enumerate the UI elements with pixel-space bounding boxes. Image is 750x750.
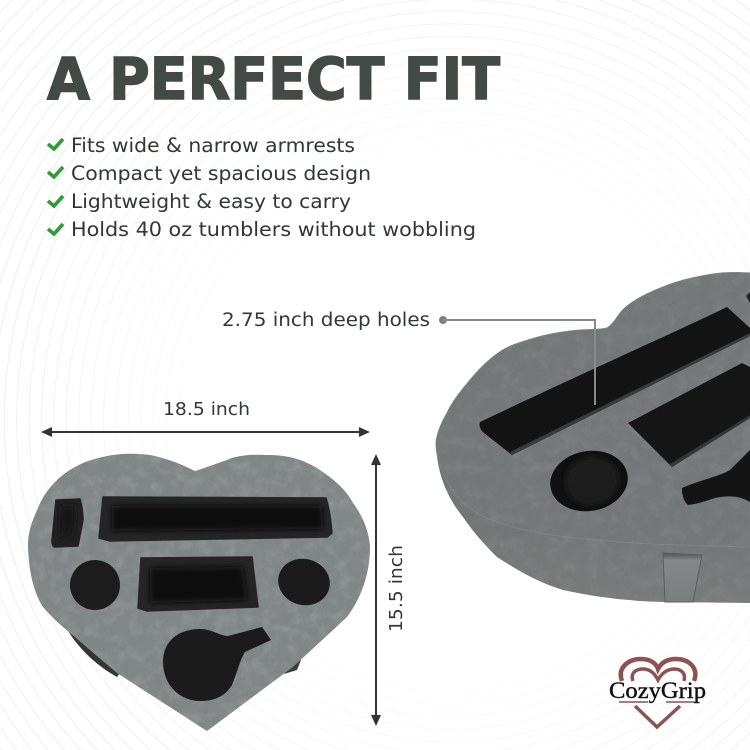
perspective cushion photo	[430, 270, 750, 610]
feature list	[48, 134, 476, 241]
rectangular hole	[628, 363, 750, 467]
small hole corner	[746, 292, 750, 303]
callout label: 2.75 inch deep holes	[222, 310, 430, 331]
small hole	[52, 499, 83, 547]
height label: 15.5 inch	[387, 545, 407, 632]
long hole lower lip	[510, 333, 750, 455]
heart arcs	[619, 659, 695, 727]
flat heart cushion	[28, 454, 370, 731]
title: A PERFECT FIT	[47, 45, 500, 113]
spoon shaped hole	[163, 627, 271, 701]
spoon shaped hole	[682, 450, 750, 505]
item: lightweight: Lightweight & easy to carry	[71, 190, 351, 213]
long hole	[480, 307, 750, 455]
middle rectangular hole	[138, 557, 258, 611]
cup hole lining	[561, 453, 623, 509]
logo wordmark: CozyGrip	[609, 678, 706, 703]
width arrow	[41, 427, 370, 437]
item: compact design: Compact yet spacious design	[71, 162, 371, 185]
width dimension	[41, 400, 370, 437]
item: wide and narrow armrests: Fits wide & narrow armrests	[71, 134, 355, 157]
brand logo: CozyGrip	[609, 659, 706, 727]
handle tab	[663, 553, 702, 602]
cushion top surface	[436, 272, 750, 547]
cushion side wall	[436, 272, 750, 603]
cushion foot right	[284, 660, 301, 674]
callout: 2.75 inch deep holes	[222, 310, 595, 405]
callout dot	[439, 316, 447, 324]
height dimension	[371, 454, 407, 726]
callout leader line	[443, 320, 595, 405]
cup hole	[545, 445, 633, 517]
width label: 18.5 inch	[163, 400, 250, 420]
cushion foot left	[63, 622, 122, 677]
heart body	[28, 454, 370, 731]
long hole	[99, 497, 332, 541]
item: 40 oz tumblers: Holds 40 oz tumblers without wobbling	[71, 218, 476, 241]
left round hole	[70, 560, 120, 610]
height arrow	[371, 454, 381, 726]
rectangular hole lower lip	[670, 415, 750, 467]
right round hole	[273, 553, 335, 611]
